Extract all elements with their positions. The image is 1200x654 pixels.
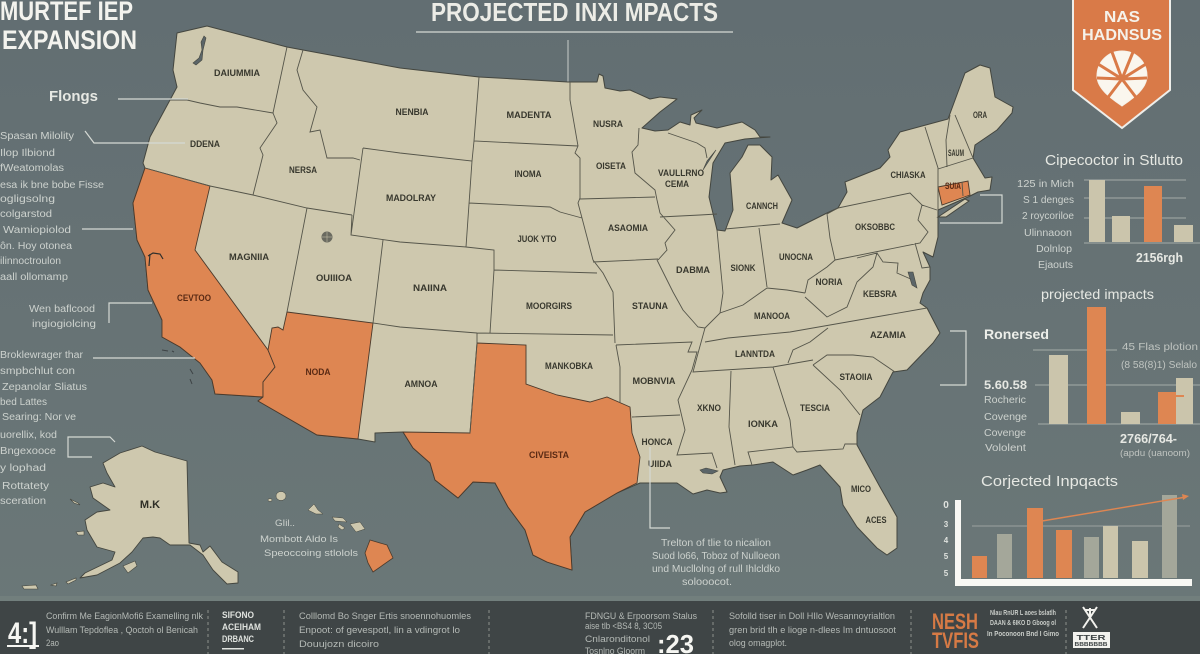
footer text 5: Sofolld tiser in Doll HIlo Wesannoyrialtlon xyxy=(729,611,895,621)
chart heading: projected impacts xyxy=(1041,286,1154,302)
state labels: SUIA xyxy=(945,181,961,191)
state labels: MANKOBKA xyxy=(545,361,593,371)
state labels: ORA xyxy=(973,110,987,120)
footer text 2 xyxy=(222,610,261,650)
note text block 3: Broklewrager thar xyxy=(0,350,84,361)
chart notes: 2766/764- xyxy=(1120,431,1177,446)
long island xyxy=(938,199,969,217)
state labels: JUOK YTO xyxy=(518,234,556,244)
chart bars xyxy=(1089,180,1193,242)
axis numbers: 4 xyxy=(944,536,949,545)
state labels: SAUM xyxy=(948,148,964,158)
note text block 2: Wen baflcood xyxy=(29,304,95,315)
note heading: flongs: Flongs xyxy=(49,88,98,105)
callout: texas note: Trelton of tlie to nicalion xyxy=(661,538,771,549)
state labels: STAOIIA xyxy=(840,372,873,382)
title: map expansion xyxy=(0,0,137,55)
chart notes xyxy=(1120,342,1198,458)
state labels: DABMA xyxy=(676,265,711,275)
map: contiguous states xyxy=(133,26,1013,570)
chart axis labels: 125 in Mich xyxy=(1017,179,1074,190)
state labels: OUIIIOA xyxy=(316,273,353,283)
side labels: Vololent xyxy=(985,443,1026,454)
state labels: MAGNIIA xyxy=(229,252,270,262)
axis numbers: 0 xyxy=(943,500,949,511)
note text block 2 xyxy=(29,304,96,330)
title: map expansion: EXPANSION xyxy=(2,25,137,55)
state labels: CANNCH xyxy=(746,201,778,211)
note text block 1: Ilop Ilbiond xyxy=(0,148,55,159)
state labels: CIVEISTA xyxy=(529,450,569,460)
note text block 1: ogligsolng xyxy=(0,194,55,205)
icon: globe marker xyxy=(322,232,332,242)
note text block 3: Zepanolar Sliatus xyxy=(2,382,87,393)
callout: texas note: solooocot. xyxy=(682,577,732,588)
note text block 3: Rottatety xyxy=(2,481,49,492)
icon: shield logo xyxy=(1073,0,1170,128)
panel: footer bar xyxy=(0,601,1200,654)
state labels: MOORGIRS xyxy=(526,301,572,311)
state labels: NERSA xyxy=(289,165,317,175)
footer text 4: aise tlb <BS4 8, 3C05 xyxy=(585,621,662,631)
state labels: AMNOA xyxy=(404,379,438,389)
panel: bar chart top xyxy=(1017,152,1200,271)
note text block 3: sceration xyxy=(0,496,46,507)
note text block 1: ilinnoctroulon xyxy=(0,256,61,267)
note text block 1: Wamiopiolod xyxy=(3,225,71,236)
callout: texas note: und Mucllolng of rull Ihlcldko xyxy=(652,564,780,575)
state labels: DAIUMMIA xyxy=(214,68,260,78)
state labels: INOMA xyxy=(514,169,542,179)
trend arrow xyxy=(1042,494,1189,521)
axis numbers: 5 xyxy=(944,552,949,561)
state labels: ACES xyxy=(866,515,886,525)
highlighted state: hawaii big island xyxy=(365,540,393,572)
chart axis labels: Ulinnaoon xyxy=(1024,228,1072,239)
note text block 2: ingiogiolcing xyxy=(32,319,96,330)
footer small print: Nlau RnUR L aoes bslatlh xyxy=(990,610,1056,617)
note text block 1: Spasan Milolity xyxy=(0,131,74,142)
state borders xyxy=(145,47,973,468)
icon: wheel emblem xyxy=(1097,51,1147,106)
state labels: MOBNVIA xyxy=(632,376,676,386)
chart notes: 45 Flas plotion xyxy=(1122,342,1198,353)
san francisco bay xyxy=(148,253,163,266)
chart axis labels: 2 roycoriloe xyxy=(1022,211,1074,222)
note text block 3: Bngexooce xyxy=(0,446,56,457)
state labels: VAULLRNO xyxy=(658,168,704,178)
footer text 2: SIFONO xyxy=(222,610,254,620)
footer text 1 xyxy=(46,611,203,648)
chart axis labels: Ejaouts xyxy=(1038,260,1073,271)
icon: footer emblem: TTER xyxy=(1076,635,1106,642)
note text block 3: Searing: Nor ve xyxy=(2,412,76,423)
note text block 3: uorellix, kod xyxy=(0,430,57,441)
state labels: MANOOA xyxy=(754,311,790,321)
footer text 1: Wulllam Tepdoflea , Qoctoh ol Benicah xyxy=(46,625,198,635)
state labels: UNOCNA xyxy=(779,252,813,262)
footer text 1: 2ao xyxy=(46,638,59,648)
state labels: ASAOMIA xyxy=(608,223,648,233)
state labels: OISETA xyxy=(596,161,626,171)
state labels: UIIDA xyxy=(648,459,672,469)
footer small print: In Poconoon Bnd I Gimo xyxy=(987,631,1059,638)
state labels: NORIA xyxy=(816,277,843,287)
panel: left notes xyxy=(0,88,195,507)
footer stat: 4:): 4:] xyxy=(8,617,37,650)
footer text 3: Enpoot: of gevespotl, lin a vdingrot lo xyxy=(299,625,460,635)
note text block 1: colgarstod xyxy=(0,209,52,220)
panel: bar chart bottom xyxy=(943,473,1192,586)
map: alaska xyxy=(22,446,238,589)
channel islands xyxy=(162,350,193,384)
note text block 1: ôn. Hoy otonea xyxy=(0,241,72,252)
state labels: NUSRA xyxy=(593,119,623,129)
icon: shield logo: HADNSUS xyxy=(1082,27,1162,44)
footer small print xyxy=(987,610,1059,638)
alaska islands xyxy=(22,499,137,589)
state labels: IONKA xyxy=(748,419,779,429)
state labels: OKSOBBC xyxy=(855,222,895,232)
chart axis labels: Dolnlop xyxy=(1036,244,1072,255)
footer brand: nesh tvfis: TVFIS xyxy=(932,628,979,653)
note text block 3: bed Lattes xyxy=(0,397,47,408)
map: hawaii: GIil.. xyxy=(275,518,295,528)
note text block 3: y lophad xyxy=(0,463,46,474)
axis numbers xyxy=(943,500,949,578)
callout: texas note xyxy=(650,447,780,588)
state labels: KEBSRA xyxy=(863,289,897,299)
highlighted state: arizona xyxy=(258,312,373,439)
chart bars xyxy=(972,495,1177,578)
footer text 4: Cnlaronditonol xyxy=(585,634,650,644)
state labels: SIONK xyxy=(730,263,756,273)
map: hawaii: Mombott Aldo Is xyxy=(260,534,339,544)
state labels: CEVTOO xyxy=(177,293,211,303)
note text block 3: smpbchlut con xyxy=(0,366,75,377)
side labels: 5.60.58 xyxy=(984,378,1027,392)
state labels: MICO xyxy=(851,484,871,494)
note text block 3 xyxy=(0,350,87,507)
footer text 4: FDNGU & Erpoorsom Stalus xyxy=(585,611,697,621)
connector bracket: connecticut xyxy=(940,195,1002,223)
chart notes: (apdu (uanoom) xyxy=(1120,448,1190,458)
land silhouette xyxy=(133,26,1013,570)
side labels: Ronersed xyxy=(984,326,1049,342)
axis numbers: 5 xyxy=(944,569,949,578)
footer brand: nesh tvfis: NESH xyxy=(932,609,978,634)
footer text 3: Douujozn dicoiro xyxy=(299,639,379,649)
footer text 3 xyxy=(299,611,472,649)
state labels xyxy=(177,68,987,525)
map: alaska: M.K xyxy=(140,499,160,511)
chart bars xyxy=(1049,307,1193,424)
state labels: LANNTDA xyxy=(735,349,775,359)
state labels: MADENTA xyxy=(506,110,552,120)
footer text 4 xyxy=(585,611,697,654)
state labels: NENBIA xyxy=(396,107,429,117)
note text block 1: esa ik bne bobe Fisse xyxy=(0,180,104,191)
state labels: HONCA xyxy=(642,437,673,447)
lakes and bays xyxy=(193,36,917,474)
footer text 3: Colllomd Bo Snger Ertis snoennohuomles xyxy=(299,611,472,621)
state labels: CHIASKA xyxy=(890,170,926,180)
state labels: AZAMIA xyxy=(870,330,907,340)
note text block 1 xyxy=(0,131,104,283)
highlighted state: connecticut xyxy=(938,181,970,205)
state labels: NAIINA xyxy=(413,283,448,293)
side labels: Covenge xyxy=(984,412,1027,423)
chart heading: Cipecoctor in Stlutto xyxy=(1045,152,1183,169)
footer text 2: DRBANC xyxy=(222,634,254,644)
panel: bar chart middle xyxy=(940,286,1200,458)
leader lines xyxy=(68,99,195,457)
highlighted state: texas xyxy=(403,343,640,570)
state labels: DDENA xyxy=(190,139,220,149)
footer brand: nesh tvfis xyxy=(932,609,979,653)
footer text 2: ACEIHAM xyxy=(222,622,261,632)
bracket connector xyxy=(940,331,966,385)
state labels: STAUNA xyxy=(632,301,668,311)
state labels: XKNO xyxy=(697,403,721,413)
chart heading: Corjected Inpqacts xyxy=(981,473,1118,490)
side labels: Covenge xyxy=(984,428,1026,439)
footer text 5: olog omagplot. xyxy=(729,638,787,648)
state labels: CEMA xyxy=(665,179,689,189)
chart notes: (8 58(8)1) Selalo xyxy=(1121,360,1197,371)
map: hawaii xyxy=(260,492,393,572)
footer text 5: gren brid tlh e lioge n-dlees Im dntuosoot xyxy=(729,625,897,635)
chart axis labels xyxy=(1017,179,1074,271)
footer small print: DAAN & 6IKO D Gboog ol xyxy=(990,620,1056,627)
footer text 1: Confirm Me EagionMofi6 Examelling nlk xyxy=(46,611,203,621)
icon: footer emblem: BBBBBBB xyxy=(1074,642,1108,648)
note text block 1: fWeatomolas xyxy=(0,163,64,174)
side labels xyxy=(984,326,1049,454)
state labels: MADOLRAY xyxy=(386,193,436,203)
highlighted state: california xyxy=(133,168,275,397)
chart axis labels: S 1 denges xyxy=(1023,195,1074,206)
note text block 1: aall ollomamp xyxy=(0,272,68,283)
icon: shield logo: NAS xyxy=(1104,9,1140,26)
callout: texas note: Suod lo66, Toboz of Nulloeon xyxy=(652,551,780,562)
axis numbers: 3 xyxy=(944,520,949,529)
chart axes xyxy=(955,500,1192,586)
map: hawaii: Speoccoing stlolols xyxy=(264,548,359,558)
footer text 5 xyxy=(729,611,897,648)
chart value: 2156rgh xyxy=(1136,250,1183,265)
state labels: NODA xyxy=(306,367,331,377)
icon: footer emblem xyxy=(1073,607,1110,648)
side labels: Rocheric xyxy=(984,395,1026,406)
state labels: TESCIA xyxy=(800,403,830,413)
